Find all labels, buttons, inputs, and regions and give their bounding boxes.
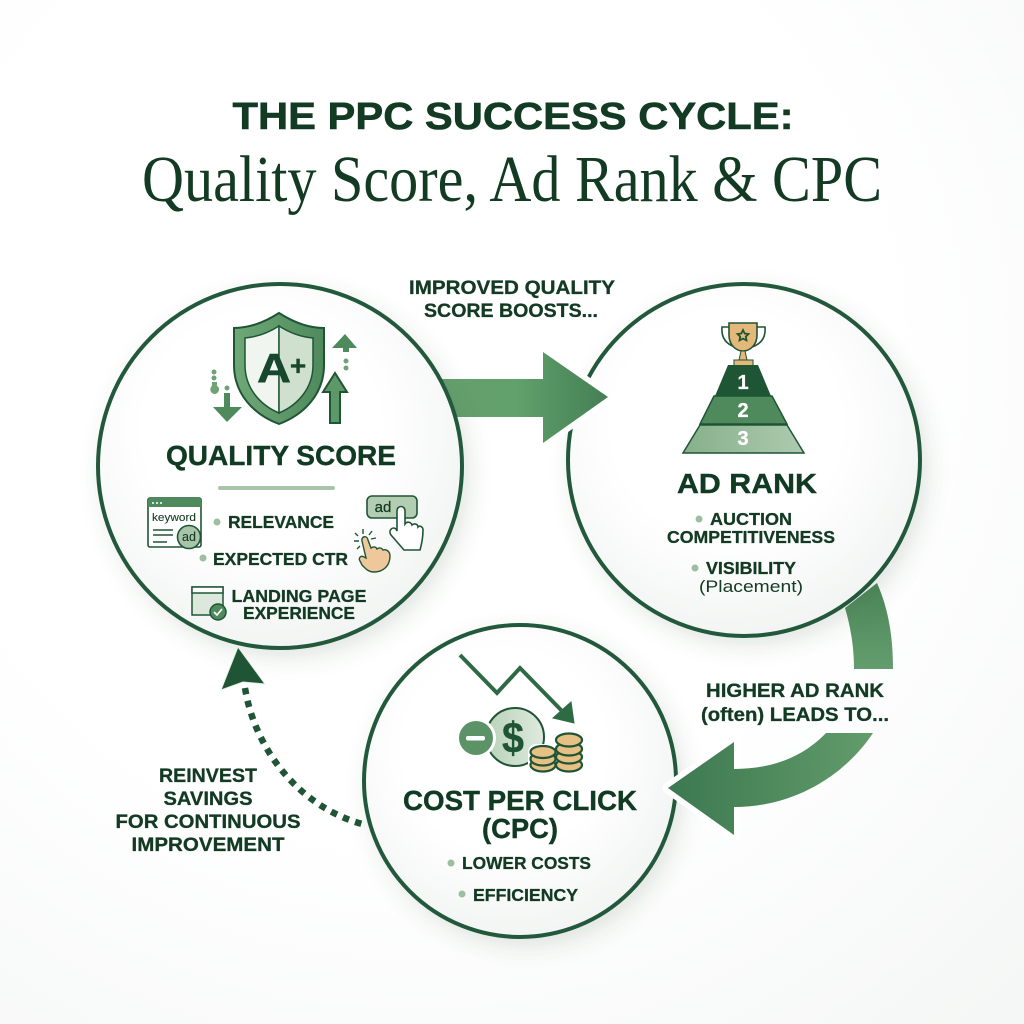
bullet: auction competitiveness: AUCTION (710, 509, 792, 529)
arrow: higher ad rank label to cost per click (668, 733, 873, 835)
icon: A+ shield: A (257, 345, 291, 391)
chart: rank pyramid: 2 (737, 400, 749, 422)
panel: ad rank (568, 284, 920, 636)
chart: rank pyramid (683, 365, 804, 453)
bullet: auction competitiveness: COMPETITIVENESS (667, 527, 835, 547)
bullet: auction competitiveness (667, 509, 835, 547)
icon: dollar coin (456, 708, 544, 766)
label: higher ad rank leads to (701, 681, 889, 726)
label: reinvest savings (116, 766, 300, 856)
text: landing page experience (232, 586, 366, 623)
label: reinvest savings: IMPROVEMENT (132, 835, 285, 856)
icon: ad button and hand: ad (375, 499, 391, 516)
icon: tan pointing hand (354, 529, 390, 572)
bullet: efficiency: EFFICIENCY (473, 885, 578, 905)
heading: ad rank: AD RANK (677, 468, 817, 499)
icon: coin stacks (528, 734, 582, 772)
heading: quality score: QUALITY SCORE (166, 440, 396, 471)
bullet: lower costs: LOWER COSTS (462, 853, 591, 873)
icon: landing page window (192, 587, 226, 620)
text: landing page experience: LANDING PAGE (232, 586, 366, 606)
label: higher ad rank leads to: HIGHER AD RANK (706, 681, 884, 702)
label: reinvest savings: FOR CONTINUOUS (116, 812, 300, 833)
label: higher ad rank leads to: (often) LEADS TO... (701, 705, 889, 726)
icon: keyword window: keyword (152, 512, 196, 524)
title: THE PPC SUCCESS CYCLE: (232, 96, 794, 138)
icon: falling trend arrow (460, 655, 574, 723)
label: improved quality score boosts (409, 278, 615, 322)
icon: keyword window: ad (182, 530, 196, 544)
label: reinvest savings: SAVINGS (164, 789, 252, 810)
arrow: ad rank to higher ad rank label (845, 583, 893, 669)
arrow: reinvest dotted return (221, 647, 362, 824)
icon: up arrows (323, 334, 357, 423)
icon: dollar coin: $ (502, 714, 524, 763)
icon: A+ shield: + (290, 350, 306, 381)
label: improved quality score boosts: IMPROVED QUALITY (409, 278, 615, 299)
bullet: relevance: RELEVANCE (228, 512, 334, 532)
icon: down arrow (210, 370, 242, 422)
bullet: visibility (692, 558, 803, 596)
bullet: expected ctr: EXPECTED CTR (213, 549, 348, 569)
chart: rank pyramid: 3 (737, 428, 749, 450)
label: reinvest savings: REINVEST (159, 766, 257, 787)
icon: A+ shield (234, 313, 324, 424)
panel: cost per click (364, 625, 676, 937)
icon: trophy (722, 323, 765, 366)
icon: keyword window (148, 498, 201, 548)
chart: rank pyramid: 1 (737, 372, 749, 394)
heading: cost per click: COST PER CLICK (403, 785, 637, 816)
text: landing page experience: EXPERIENCE (243, 603, 355, 623)
bullet: visibility: (Placement) (699, 577, 803, 596)
title: Quality Score, Ad Rank & CPC (142, 143, 882, 216)
bullet: visibility: VISIBILITY (706, 558, 796, 578)
heading: cost per click: (CPC) (482, 813, 558, 844)
heading: cost per click (403, 785, 637, 844)
arrow: quality score to ad rank (440, 352, 608, 443)
title (142, 96, 882, 216)
panel: quality score (98, 284, 462, 648)
icon: ad button and hand (367, 496, 423, 550)
label: improved quality score boosts: SCORE BOOSTS... (424, 301, 598, 322)
divider (218, 486, 335, 490)
